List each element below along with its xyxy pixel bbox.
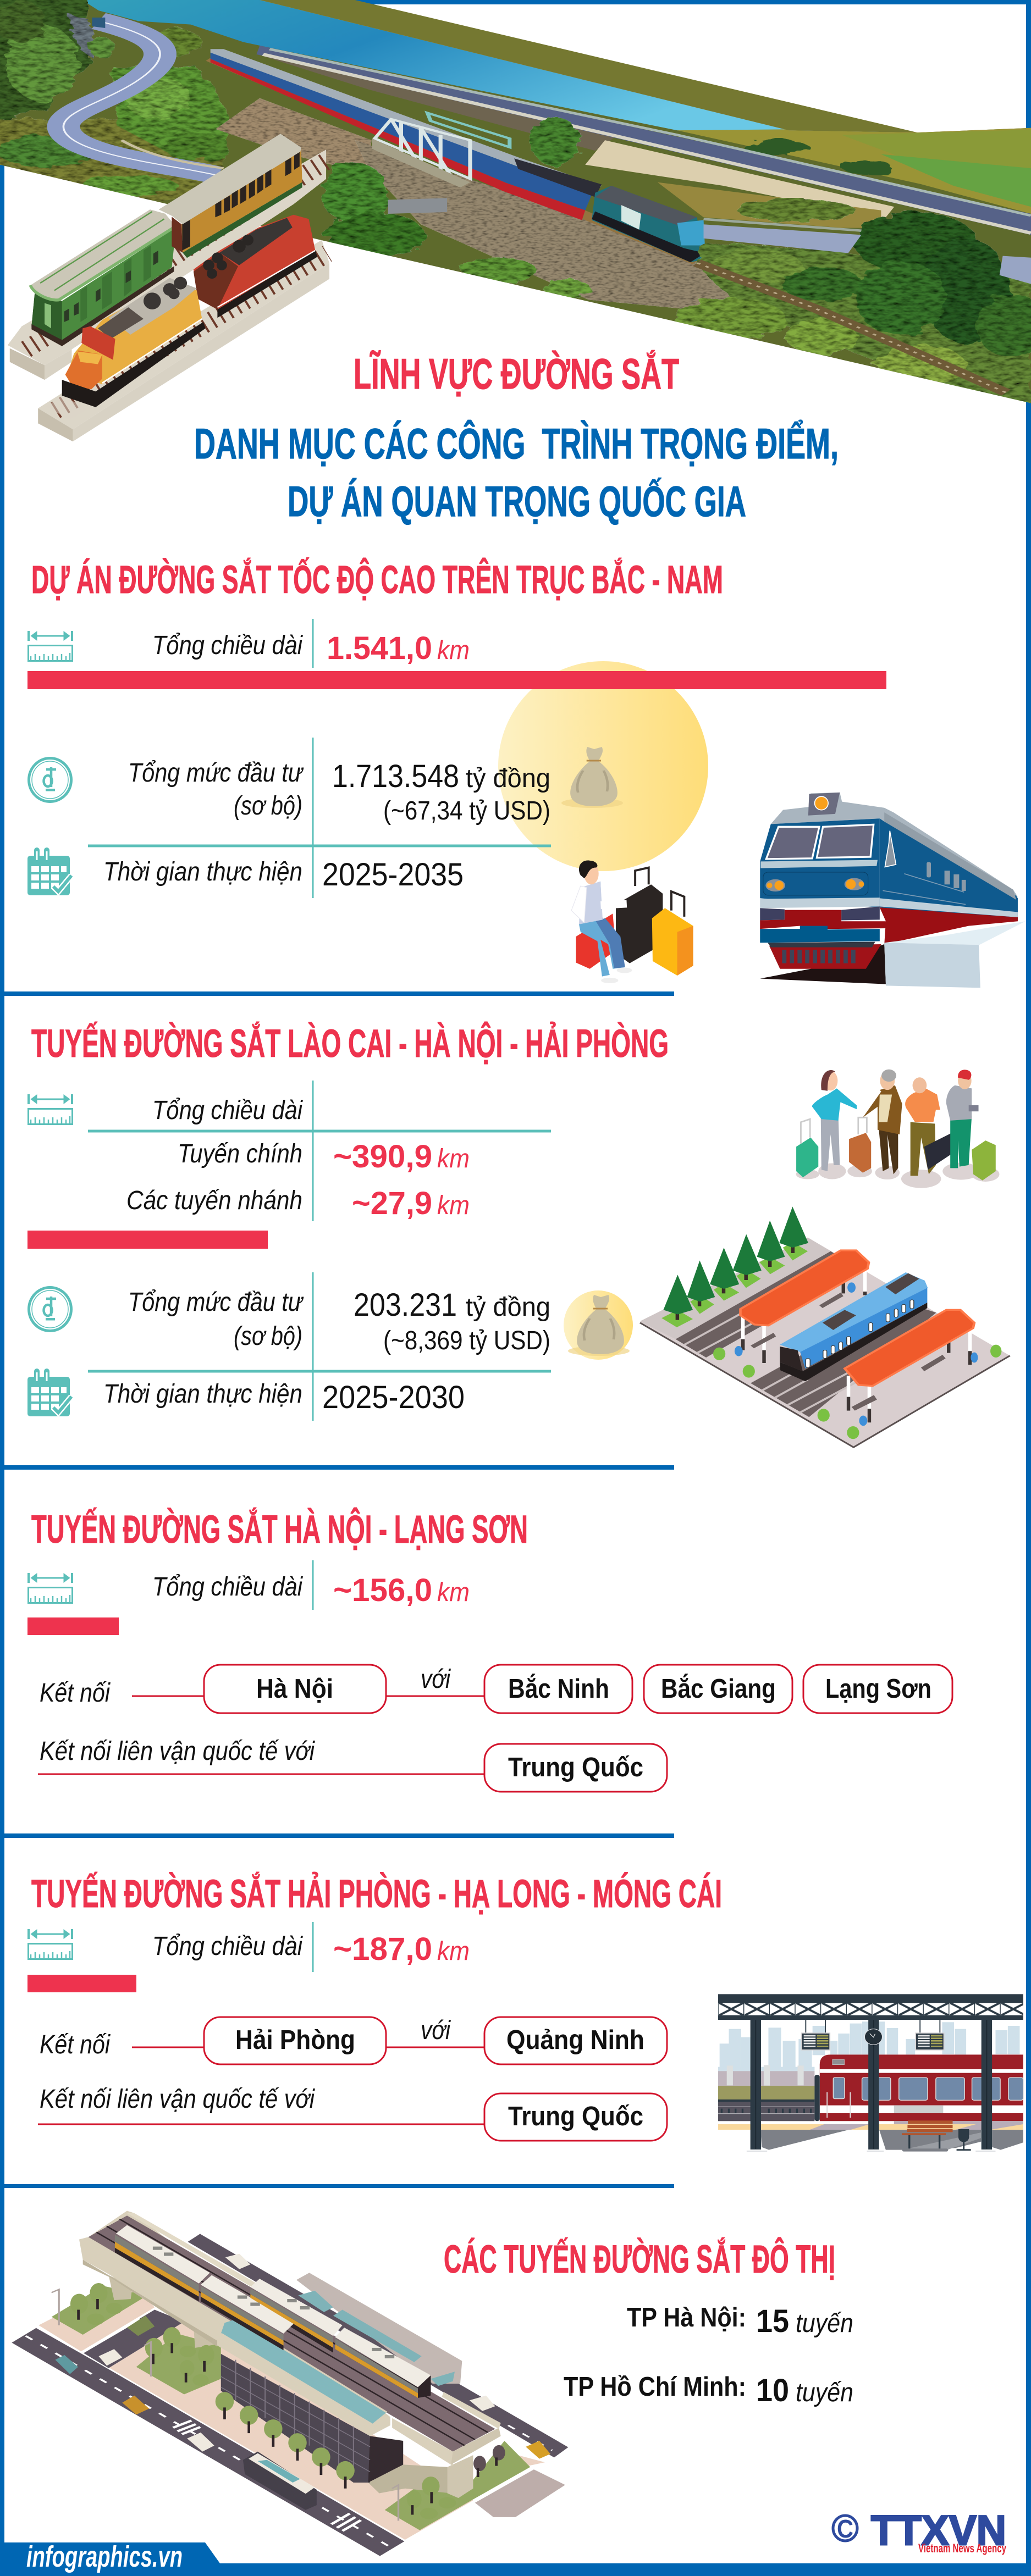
label: with: với [421, 2016, 451, 2045]
connector lines [38, 2047, 484, 2124]
label: branch lines: Các tuyến nhánh [126, 1186, 302, 1215]
pill: Bac Giang [644, 1665, 792, 1713]
length bar [27, 1975, 136, 1992]
value: total investment: 203.231 [354, 1287, 457, 1323]
stat: Ha Noi: TP Hà Nội: [627, 2303, 746, 2333]
value: total length: km [437, 636, 470, 665]
value: total investment: (~67,34 tỷ USD) [383, 796, 550, 826]
value: total investment: (~8,369 tỷ USD) [383, 1326, 550, 1355]
value: duration: 2025-2035 [322, 857, 464, 893]
pill: Hai Phong [204, 2017, 386, 2064]
label: duration: Thời gian thực hiện [103, 1380, 302, 1409]
pill: Lang Son: Lạng Sơn [825, 1674, 931, 1704]
footer band [0, 2540, 1031, 2576]
pill: Ha Noi [204, 1665, 386, 1713]
pill: Bac Giang: Bắc Giang [661, 1674, 776, 1704]
section divider [4, 991, 674, 996]
stat: Ho Chi Minh City: 10 [756, 2373, 789, 2408]
value: branch lines: km [437, 1191, 470, 1220]
label: connects: Kết nối [40, 1678, 111, 1708]
value: total investment [354, 1287, 550, 1355]
value: total length: ~156,0 [333, 1572, 432, 1608]
pill: Quang Ninh: Quảng Ninh [506, 2025, 644, 2055]
stat: Ho Chi Minh City: tuyến [796, 2378, 853, 2407]
illustration: isometric locomotives on tracks [8, 134, 329, 441]
pill: China: Trung Quốc [508, 2102, 643, 2131]
illustration: elevated metro station [11, 2211, 569, 2556]
footer: website: infographics.vn [26, 2540, 183, 2573]
value: total investment [332, 758, 550, 826]
section divider [4, 1465, 674, 1470]
yellow circle behind money bag [498, 661, 708, 871]
illustration: travellers group [796, 1070, 999, 1188]
table lines [88, 1081, 551, 1421]
label: with: với [421, 1665, 451, 1694]
icon: dong coin [29, 758, 71, 801]
label: total investment: Tổng mức đầu tư [128, 758, 304, 788]
illustration: isometric train station [640, 1206, 1010, 1447]
section divider [4, 1833, 674, 1838]
pill: Quang Ninh [484, 2017, 667, 2064]
label: connects: Kết nối [40, 2030, 111, 2059]
icon: calendar [27, 850, 71, 895]
label: duration: Thời gian thực hiện [103, 857, 302, 887]
pill: Ha Noi: Hà Nội [256, 1674, 333, 1704]
length bar [27, 1231, 268, 1249]
value: main line: ~390,9 [333, 1139, 432, 1175]
label: total length: Tổng chiều dài [152, 1572, 303, 1602]
icon: ruler [27, 631, 73, 661]
stat: Ha Noi: 15 [756, 2303, 789, 2339]
panel: Ha Noi - Lang Son railway [4, 1508, 952, 1838]
label: total investment [128, 1288, 304, 1351]
stat: Ha Noi: tuyến [796, 2309, 853, 2338]
pill: Lang Son [803, 1665, 952, 1713]
panel: Hai Phong - Ha Long - Mong Cai railway [4, 1872, 1023, 2188]
label: total investment [128, 758, 304, 821]
label: total length: Tổng chiều dài [152, 1096, 303, 1125]
label: total investment: (sơ bộ) [234, 791, 302, 821]
illustration: station platform with red train [718, 1994, 1023, 2152]
value: total length: km [437, 1578, 470, 1607]
value: main line: km [437, 1144, 470, 1173]
header photo: railway beside the coast [0, 0, 1031, 407]
illustration: seated passenger with luggage [571, 860, 693, 983]
logo: TTXVN Vietnam News Agency: TTXVN [871, 2507, 1006, 2554]
heading: list line 2: DỰ ÁN QUAN TRỌNG QUỐC GIA [288, 477, 746, 525]
pill: Hai Phong: Hải Phòng [235, 2025, 355, 2055]
value: total investment: tỷ đồng [466, 1293, 550, 1322]
icon: dong coin [29, 1287, 71, 1331]
icon: money bag in circle [564, 1290, 633, 1360]
pill: China: Trung Quốc [508, 1753, 643, 1782]
panel: urban railway lines [11, 2211, 853, 2556]
panel: North-South high-speed railway [4, 558, 1026, 996]
stat: Ha Noi [627, 2303, 853, 2339]
heading: sector: LĨNH VỰC ĐƯỜNG SẮT [354, 350, 679, 398]
value: duration: 2025-2030 [322, 1380, 465, 1415]
divider line [312, 1560, 313, 1610]
table lines [88, 619, 551, 898]
value: total investment: 1.713.548 [332, 758, 459, 794]
logo: TTXVN Vietnam News Agency: C [837, 2514, 853, 2543]
panel: Lao Cai - Ha Noi - Hai Phong railway [4, 1022, 1010, 1470]
icon: money bag [561, 747, 623, 808]
stat: Ho Chi Minh City: TP Hồ Chí Minh: [564, 2372, 746, 2402]
length bar [27, 1617, 119, 1635]
value: total length: km [437, 1937, 470, 1966]
value: total length: 1.541,0 [327, 630, 432, 666]
icon: ruler [27, 1094, 73, 1124]
pill: China [484, 1744, 667, 1792]
value: branch lines [352, 1185, 470, 1221]
pill: China [484, 2093, 667, 2141]
label: main line: Tuyến chính [178, 1139, 302, 1168]
label: international connection: Kết nối liên vận quốc tế với [40, 2085, 315, 2114]
illustration: blue diesel locomotive at platform [760, 793, 1026, 988]
label: total investment: (sơ bộ) [234, 1322, 302, 1351]
value: total investment: tỷ đồng [466, 764, 550, 793]
connector lines [38, 1696, 484, 1774]
stat: Ho Chi Minh City [564, 2372, 853, 2408]
section divider [4, 2184, 674, 2188]
icon: calendar [27, 1371, 71, 1416]
heading: TUYẾN ĐƯỜNG SẮT LÀO CAI - HÀ NỘI - HẢI PHÒNG [31, 1022, 669, 1066]
label: international connection: Kết nối liên vận quốc tế với [40, 1737, 315, 1766]
label: total length: Tổng chiều dài [152, 1932, 303, 1961]
pill: Bac Ninh: Bắc Ninh [508, 1674, 609, 1704]
label: total length: Tổng chiều dài [152, 631, 303, 660]
heading: TUYẾN ĐƯỜNG SẮT HÀ NỘI - LẠNG SƠN [31, 1508, 528, 1552]
icon: ruler [27, 1929, 73, 1959]
length bar [27, 671, 886, 689]
pill: Bac Ninh [484, 1665, 632, 1713]
title [194, 350, 839, 525]
value: branch lines: ~27,9 [352, 1185, 432, 1221]
label: total investment: Tổng mức đầu tư [128, 1288, 304, 1317]
icon: ruler [27, 1573, 73, 1603]
divider line [312, 1922, 313, 1972]
value: total length: ~187,0 [333, 1931, 432, 1967]
